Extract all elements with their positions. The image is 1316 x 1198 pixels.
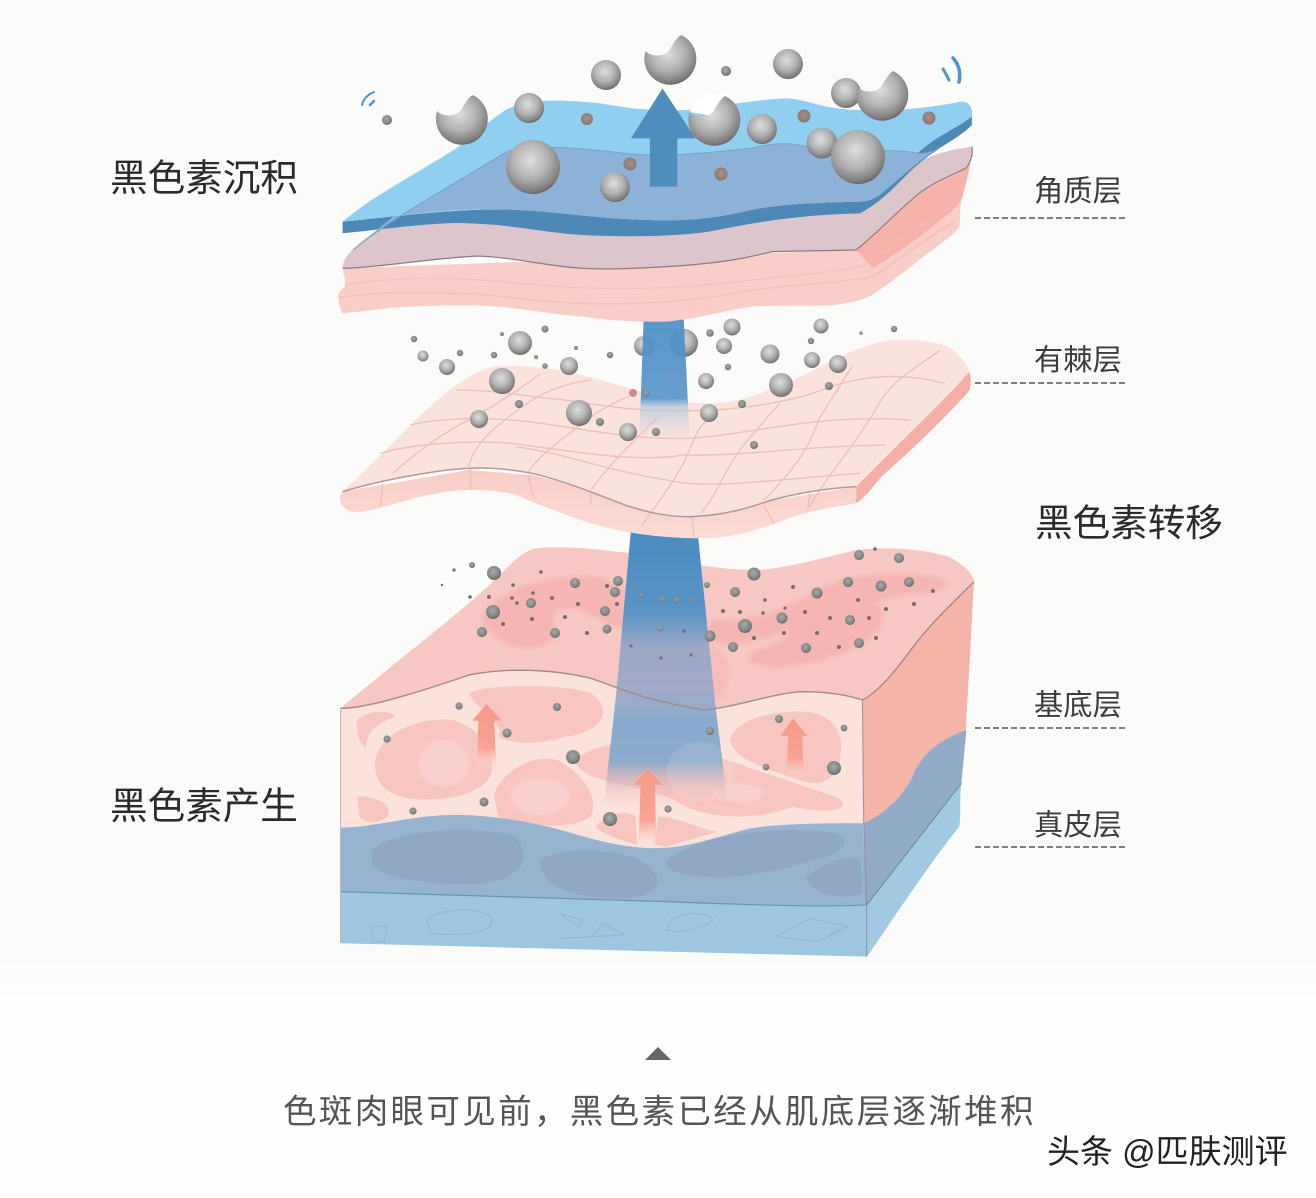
arrow: left salmon arrow — [472, 704, 502, 768]
label: basal layer: 基底层 — [1034, 689, 1122, 722]
icon: caption triangle — [645, 1047, 671, 1060]
watermark: 头条 @匹肤测评 — [1047, 1133, 1288, 1170]
heading: melanin transfer: 黑色素转移 — [1035, 502, 1223, 544]
illustration: top layers (stratum corneum) — [338, 88, 972, 322]
basal layer right face — [862, 582, 974, 823]
melanin particles behind transfer beam — [634, 329, 698, 357]
beam: melanin transfer column through spinous layer — [639, 315, 690, 442]
structural edges — [341, 582, 974, 957]
beam: melanin transfer column through basal layer — [604, 530, 728, 807]
basal layer top surface — [341, 547, 974, 710]
heading: melanin deposition: 黑色素沉积 — [110, 157, 298, 199]
blue side band — [343, 115, 972, 236]
label: stratum corneum: 角质层 — [1034, 175, 1122, 208]
icon: blue motion marks right — [943, 58, 960, 82]
illustration: middle spinous layer sheet — [340, 340, 971, 538]
blue top surface — [343, 98, 972, 222]
caption: 色斑肉眼可见前，黑色素已经从肌底层逐渐堆积 — [283, 1094, 1036, 1131]
dermis front face — [341, 815, 867, 957]
arrow: right salmon arrow — [780, 718, 808, 778]
faint bubble glow — [667, 742, 734, 802]
melanin particles around spinous layer — [411, 318, 897, 449]
melanin particles above top layer — [382, 35, 936, 202]
label: dermis: 真皮层 — [1034, 809, 1122, 842]
inner panel outline — [353, 144, 940, 250]
grey-mauve textured layer — [343, 147, 972, 269]
heading: melanin production: 黑色素产生 — [110, 785, 298, 827]
illustration: bottom skin block (basal layer and dermis) — [341, 530, 974, 957]
basal layer front face — [341, 670, 864, 857]
dermis right faces — [864, 730, 966, 957]
sheet front edge — [340, 470, 856, 538]
sheet right side — [856, 372, 971, 503]
pink epidermis bands — [338, 147, 972, 322]
sheet front edge outline — [343, 468, 856, 517]
melanin particles in basal layer — [383, 547, 935, 826]
label: spinous layer: 有棘层 — [1034, 344, 1122, 377]
darker inner panel on blue surface — [353, 144, 940, 250]
sheet grid lines — [381, 350, 945, 538]
sheet top surface — [343, 340, 969, 517]
arrow: blue upward arrow — [631, 88, 695, 187]
icon: blue motion marks left — [362, 92, 374, 105]
white backing behind bitten sphere — [690, 95, 725, 116]
arrow: centre salmon arrow — [634, 768, 663, 845]
crescent spheres — [436, 35, 908, 146]
